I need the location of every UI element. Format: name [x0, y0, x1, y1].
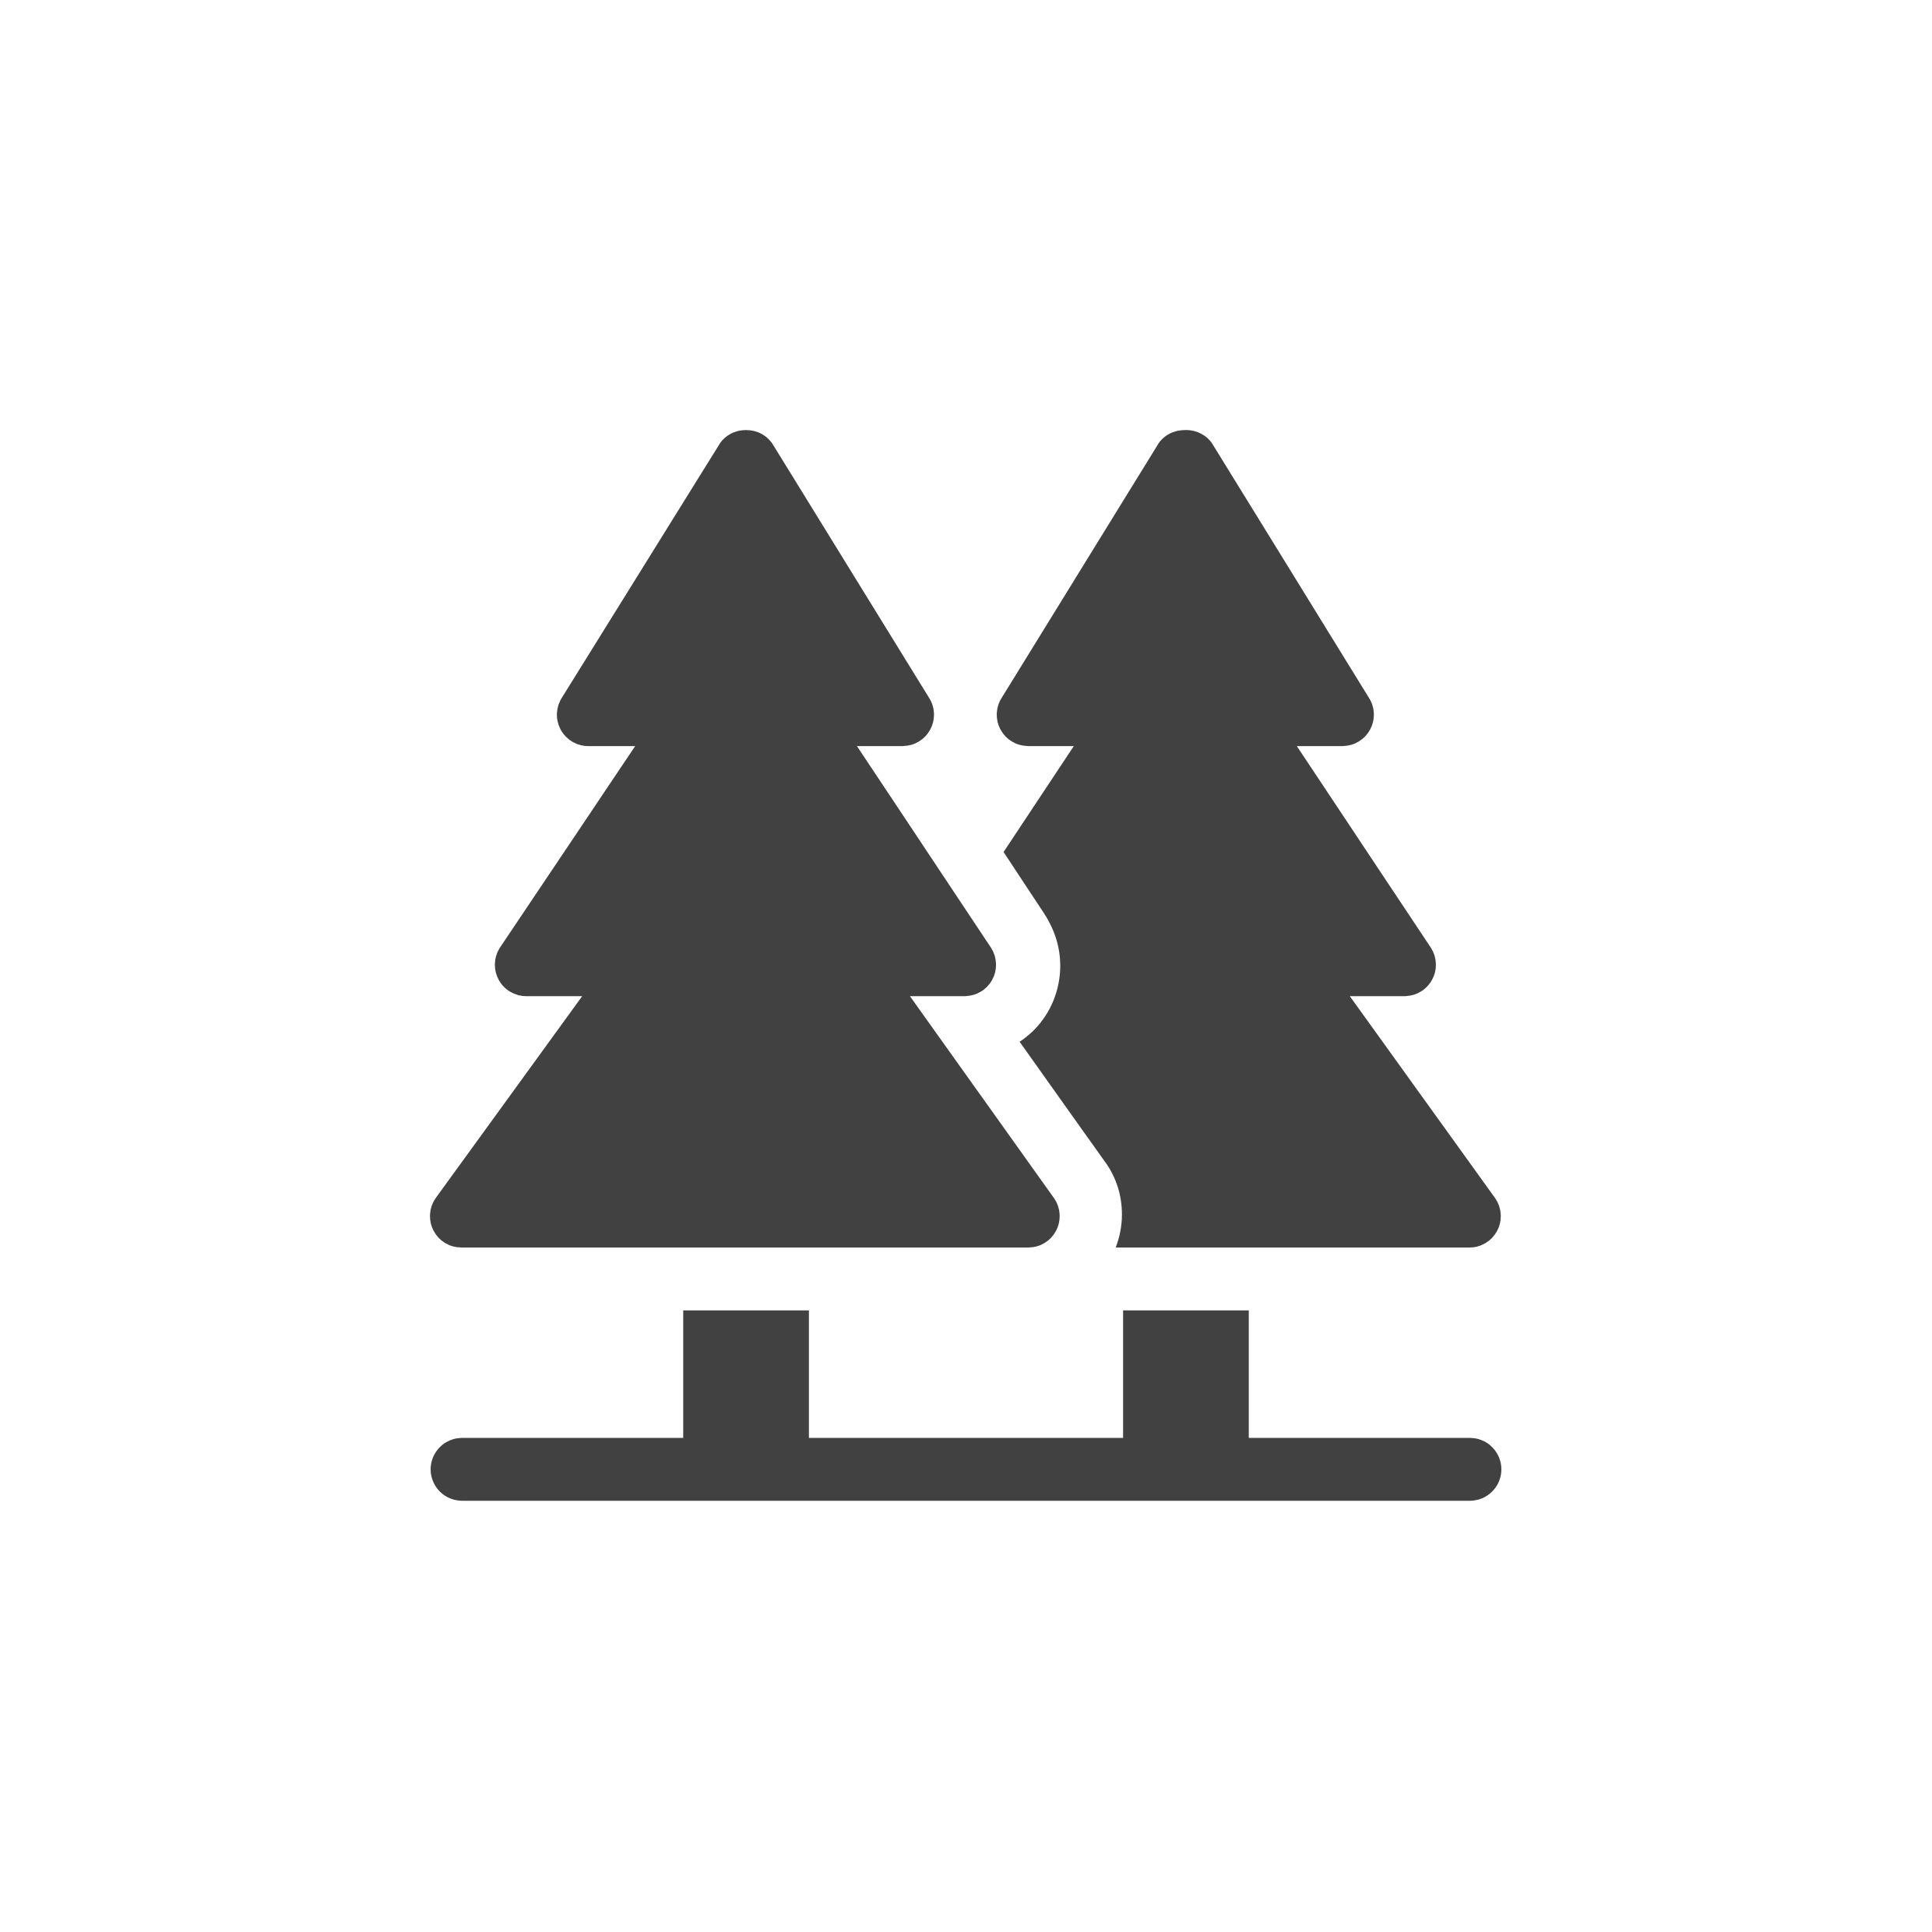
right tree trunk	[1123, 1311, 1249, 1446]
icon group	[430, 430, 1501, 1501]
right tree crown	[997, 430, 1501, 1248]
ground bar	[431, 1438, 1501, 1501]
left tree crown	[430, 430, 1060, 1248]
left tree trunk	[683, 1311, 809, 1446]
